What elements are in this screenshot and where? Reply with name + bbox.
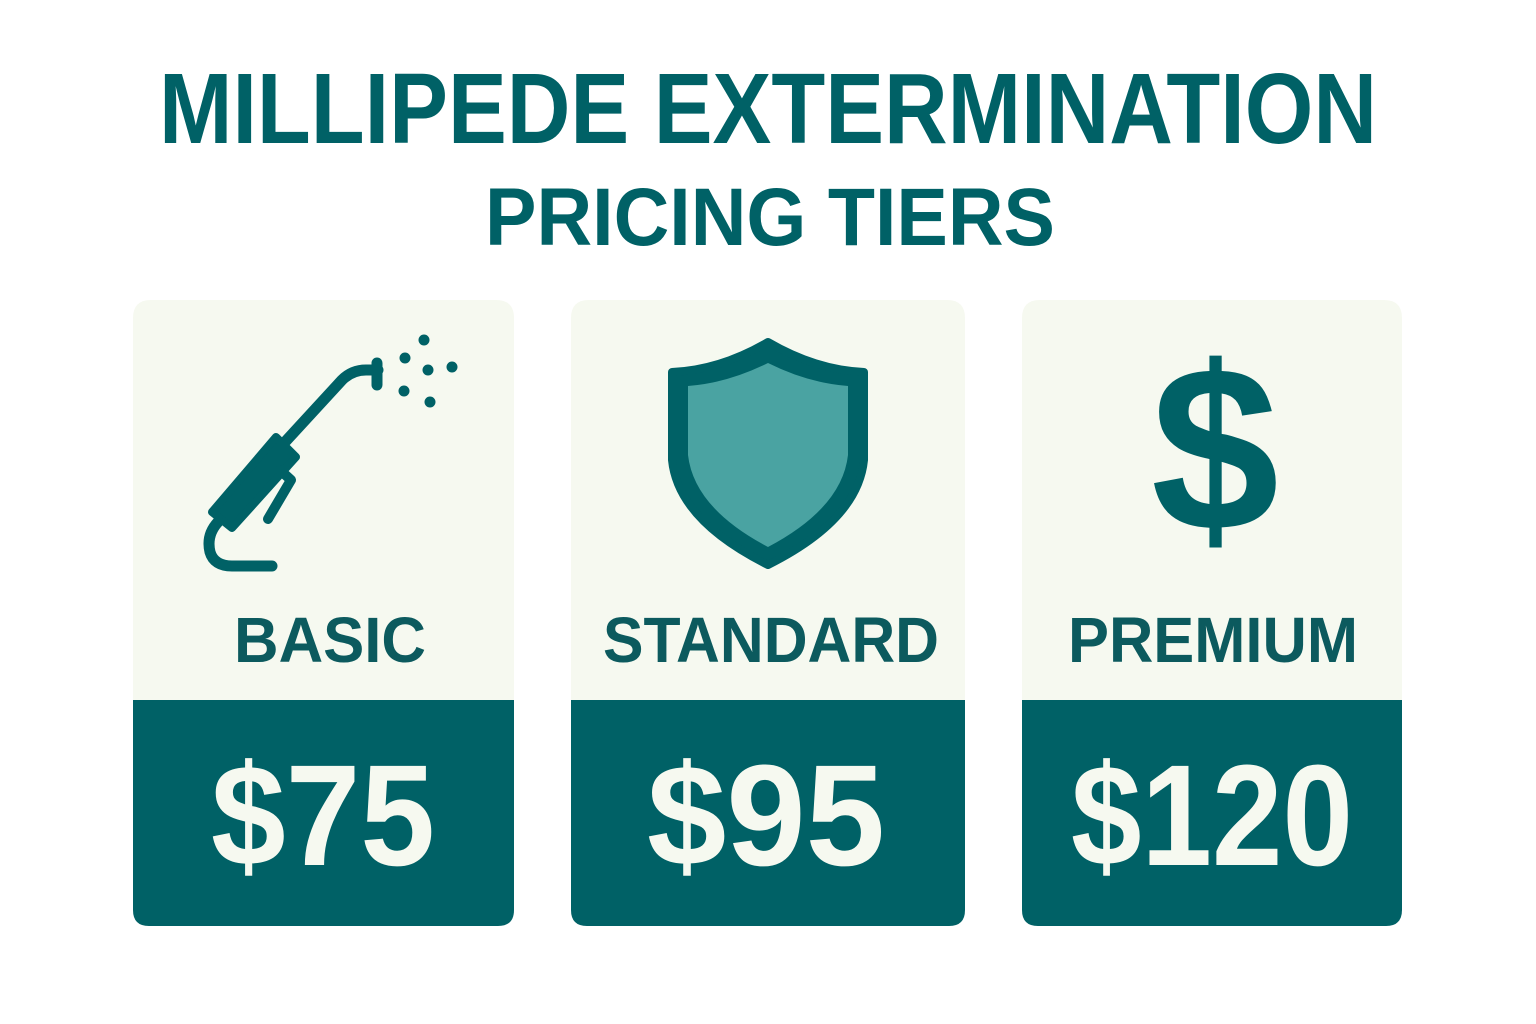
price: basic: $75 [211,735,435,896]
icon: shield [672,342,864,565]
label: standard: STANDARD [603,604,939,676]
title: PRICING TIERS [485,172,1055,263]
price: premium: $120 [1071,735,1353,896]
label: premium: PREMIUM [1068,604,1358,676]
label: basic: BASIC [234,604,426,676]
price: standard: $95 [647,735,885,896]
icon: dollar: $ [1151,317,1279,580]
title: MILLIPEDE EXTERMINATION [159,53,1377,165]
panel: basic [133,300,514,926]
title [159,53,1377,263]
panel: standard [571,300,965,926]
panel: premium [1022,300,1402,926]
icon: sprayer [209,335,457,566]
